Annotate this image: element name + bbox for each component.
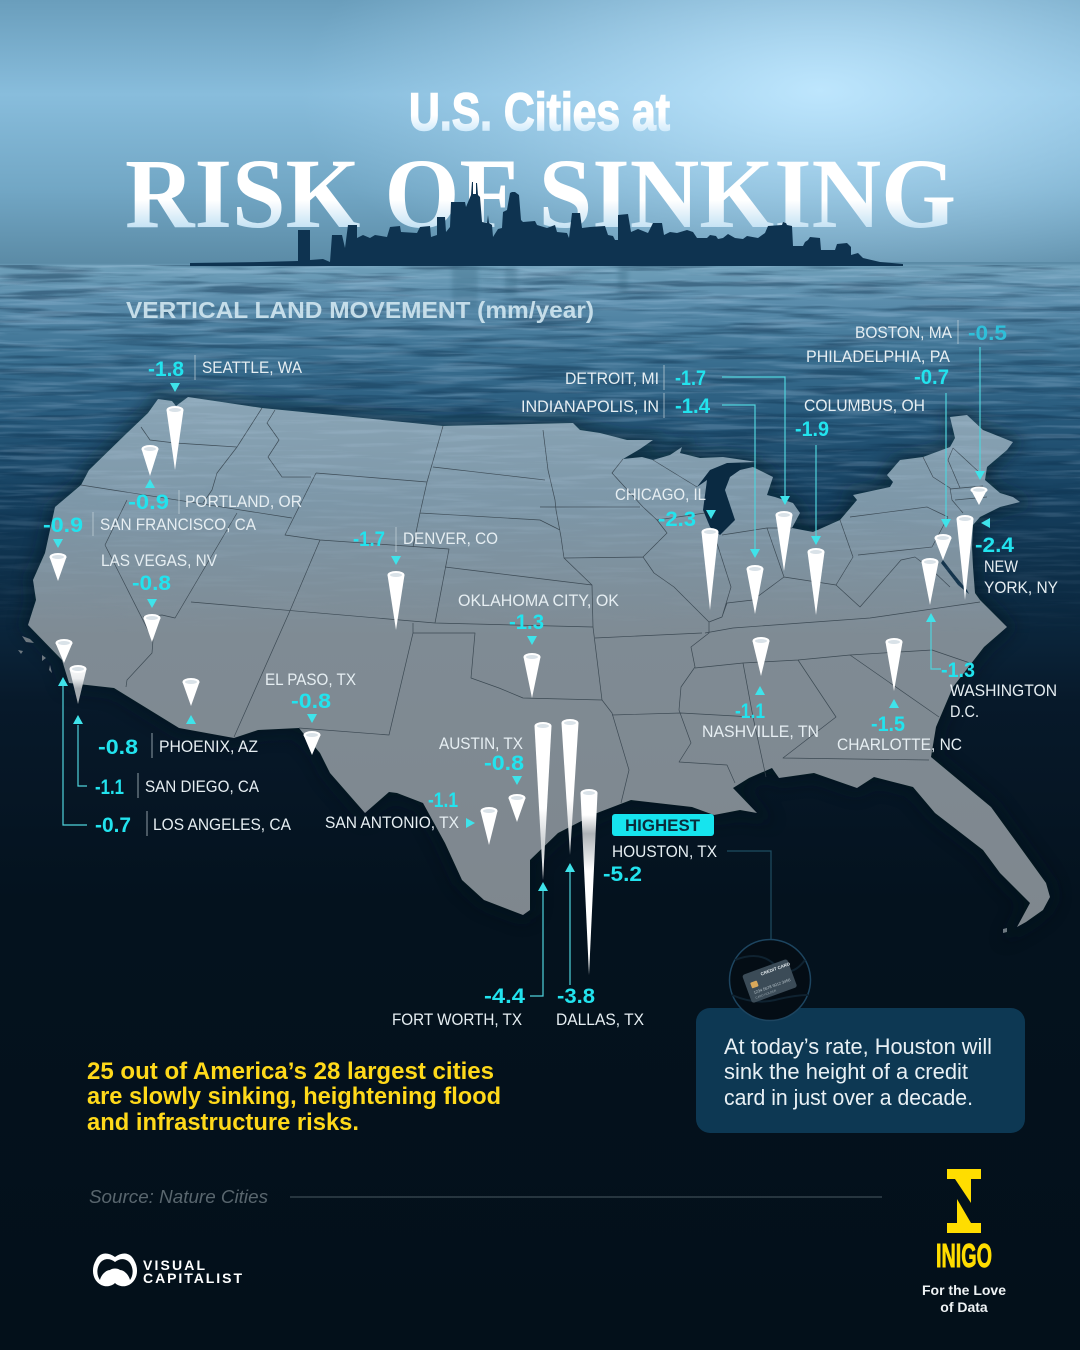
city: Austin — [439, 734, 526, 822]
key takeaway text: and infrastructure risks. — [87, 1109, 359, 1136]
city: Seattle — [148, 355, 303, 470]
title: U.S. Cities at: U.S. Cities at — [409, 83, 670, 142]
city: Houston highest — [580, 789, 771, 975]
city: Portland: PORTLAND, OR — [185, 492, 302, 511]
city: San Diego — [70, 665, 260, 799]
city: El Paso: EL PASO, TX — [265, 670, 356, 689]
city: Indianapolis: -1.4 — [675, 395, 710, 418]
city: Phoenix: -0.8 — [98, 736, 138, 759]
city: Houston highest: -5.2 — [603, 863, 642, 886]
city: Los Angeles: -0.7 — [95, 814, 131, 837]
city: San Antonio: -1.1 — [428, 789, 458, 812]
city: Austin: AUSTIN, TX — [439, 734, 523, 753]
logo: Inigo: For the Love — [922, 1282, 1006, 1298]
city: Boston: -0.5 — [968, 322, 1007, 345]
city: Detroit: DETROIT, MI — [565, 369, 659, 388]
icon: credit card in circle: CREDIT CARD — [760, 961, 791, 977]
city: Columbus — [795, 396, 925, 615]
city: San Antonio — [325, 789, 498, 845]
city: Washington D.C.: D.C. — [950, 702, 979, 721]
city: Seattle: -1.8 — [148, 358, 184, 381]
city: Washington D.C.: -1.3 — [941, 659, 975, 682]
city: Washington D.C.: WASHINGTON — [950, 681, 1057, 700]
city: Nashville: NASHVILLE, TN — [702, 722, 819, 741]
logo: Visual Capitalist — [93, 1254, 242, 1286]
background: sky and ocean — [0, 0, 1080, 836]
city: Columbus: -1.9 — [795, 418, 829, 441]
city: El Paso: -0.8 — [291, 690, 331, 713]
city: San Diego: -1.1 — [95, 776, 124, 799]
city: Charlotte: CHARLOTTE, NC — [837, 735, 962, 754]
logo: Inigo: INIGO — [936, 1237, 992, 1274]
city: Philadelphia — [806, 347, 952, 560]
city: Denver: DENVER, CO — [403, 529, 498, 548]
city: San Francisco: -0.9 — [43, 514, 83, 537]
city: Fort Worth: -4.4 — [484, 985, 525, 1008]
city: Philadelphia: -0.7 — [914, 366, 949, 389]
city: San Francisco — [43, 512, 257, 581]
city: Houston highest: HIGHEST — [625, 816, 701, 835]
city: Phoenix: PHOENIX, AZ — [159, 737, 258, 756]
city: San Diego: SAN DIEGO, CA — [145, 777, 260, 796]
city: Portland — [128, 445, 302, 514]
city: Houston highest: HOUSTON, TX — [612, 842, 717, 861]
city: Charlotte: -1.5 — [871, 713, 905, 736]
city: Washington D.C. — [922, 558, 1057, 721]
callout: Houston credit card — [696, 1008, 1025, 1133]
city: New York: NEW — [984, 557, 1018, 576]
city: Nashville — [702, 637, 819, 741]
city: Fort Worth — [392, 722, 552, 1029]
city: Oklahoma City: -1.3 — [509, 611, 544, 634]
callout: Houston credit card: sink the height of a credit — [724, 1059, 968, 1084]
logo: Inigo: of Data — [940, 1299, 988, 1315]
city: Las Vegas: -0.8 — [132, 572, 171, 595]
city: Chicago: CHICAGO, IL — [615, 485, 706, 504]
callout: Houston credit card: At today’s rate, Houston will — [724, 1034, 992, 1059]
logo: Visual Capitalist: CAPITALIST — [143, 1270, 242, 1286]
city: Indianapolis: INDIANAPOLIS, IN — [521, 397, 659, 416]
city: Denver: -1.7 — [353, 528, 385, 551]
source line: Source: Nature Cities — [89, 1187, 268, 1207]
logo: Inigo — [922, 1169, 1006, 1315]
city: Dallas: DALLAS, TX — [556, 1010, 644, 1029]
city: Denver — [353, 527, 498, 630]
city: Austin: -0.8 — [484, 752, 524, 775]
city: Philadelphia: PHILADELPHIA, PA — [806, 347, 951, 366]
callout: Houston credit card: card in just over a decade. — [724, 1085, 973, 1110]
key takeaway text — [87, 1058, 501, 1136]
city: Los Angeles — [56, 639, 292, 837]
city: Columbus: COLUMBUS, OH — [804, 396, 925, 415]
icon: credit card in circle: CARD HOLDER — [755, 988, 778, 1000]
city: Dallas — [556, 719, 644, 1029]
city: Oklahoma City — [458, 591, 620, 698]
map of the contiguous United States — [0, 395, 1080, 933]
city: Las Vegas: LAS VEGAS, NV — [101, 551, 218, 570]
city: Chicago — [615, 485, 718, 610]
icon: credit card in circle: 1234 5678 9012 3456 — [753, 977, 792, 995]
city: Seattle: SEATTLE, WA — [202, 358, 303, 377]
key takeaway text: are slowly sinking, heightening flood — [87, 1083, 501, 1110]
city: Indianapolis — [521, 393, 764, 614]
city: San Francisco: SAN FRANCISCO, CA — [100, 515, 257, 534]
key takeaway text: 25 out of America’s 28 largest cities — [87, 1058, 494, 1085]
city: El Paso — [265, 670, 356, 755]
city: Chicago: -2.3 — [658, 508, 696, 531]
city: Fort Worth: FORT WORTH, TX — [392, 1010, 522, 1029]
city: Boston: BOSTON, MA — [855, 323, 953, 342]
city: Dallas: -3.8 — [557, 985, 595, 1008]
skyline silhouette — [190, 182, 903, 308]
city: New York — [956, 515, 1058, 600]
city: Nashville: -1.1 — [735, 700, 765, 723]
city: San Antonio: SAN ANTONIO, TX — [325, 813, 459, 832]
city: New York: -2.4 — [975, 534, 1014, 557]
city: Charlotte — [837, 638, 962, 754]
city: Detroit: -1.7 — [675, 367, 706, 390]
logo: Visual Capitalist: VISUAL — [143, 1257, 205, 1273]
title: Risk of Sinking: RISK OF SINKING — [125, 138, 956, 249]
city: Portland: -0.9 — [128, 491, 169, 514]
city: Las Vegas — [101, 551, 218, 642]
icon: credit card in circle — [730, 940, 810, 1020]
city: Phoenix — [98, 678, 258, 759]
city: Boston — [855, 320, 1007, 505]
subtitle: vertical land movement: VERTICAL LAND MOVEMENT (mm/year) — [126, 297, 594, 323]
city: New York: YORK, NY — [984, 578, 1058, 597]
city: Oklahoma City: OKLAHOMA CITY, OK — [458, 591, 620, 610]
city: Los Angeles: LOS ANGELES, CA — [153, 815, 292, 834]
city: Detroit — [565, 365, 792, 571]
